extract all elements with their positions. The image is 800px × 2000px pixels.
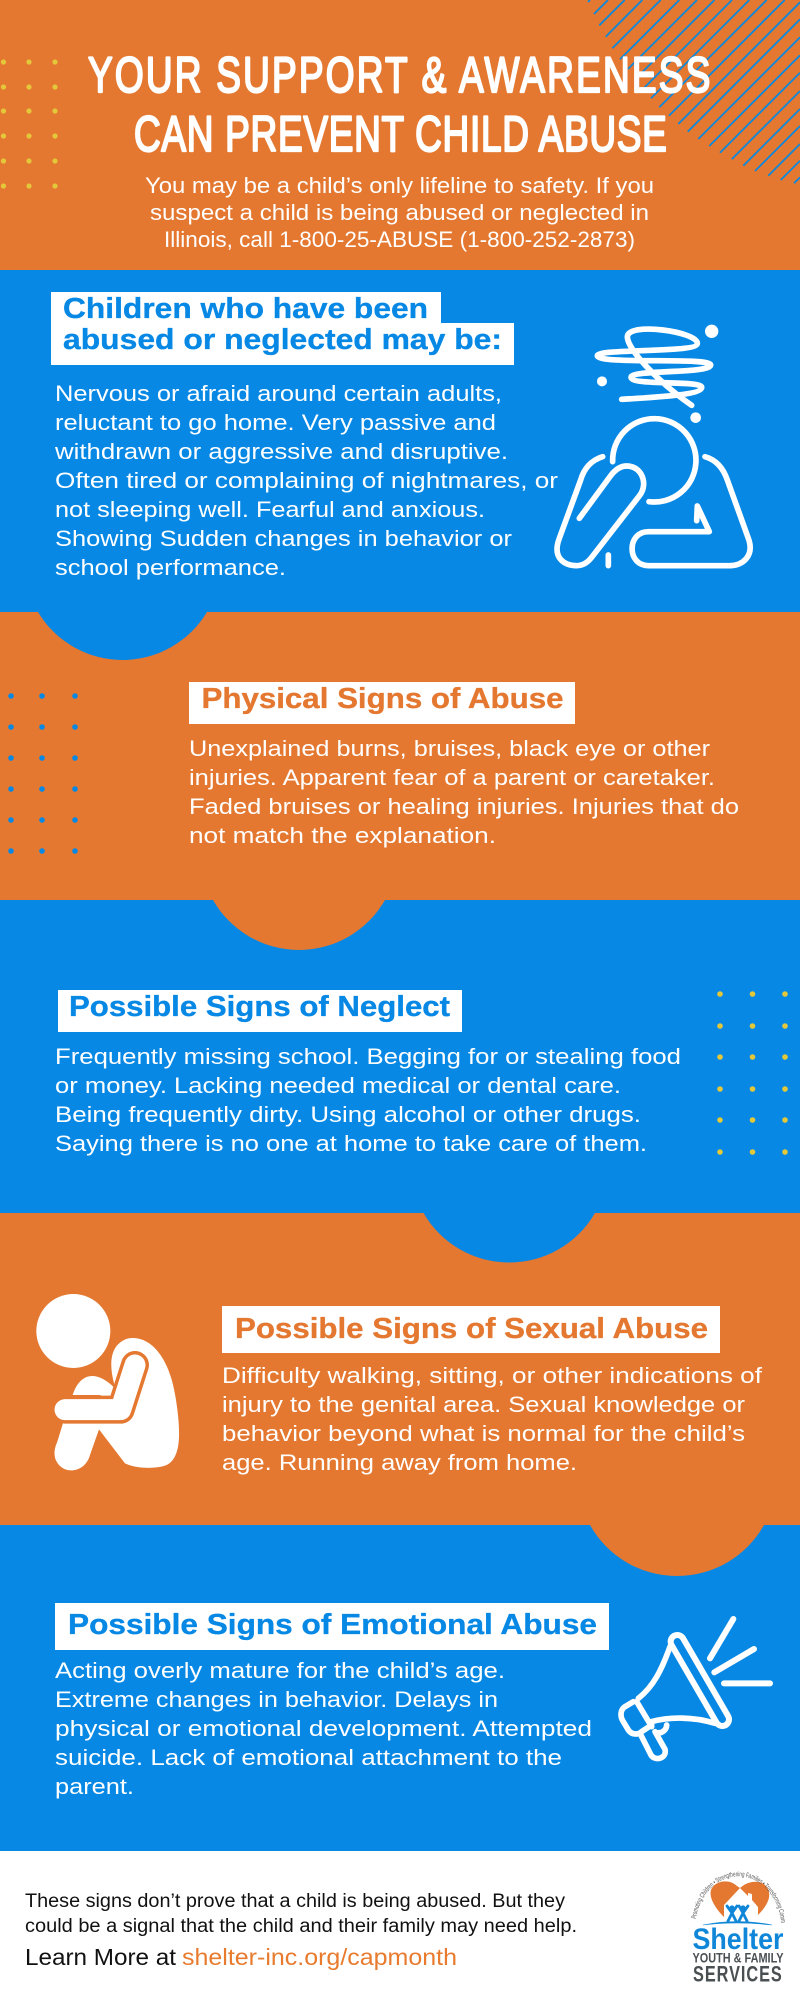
body text: physical or emotional development. Attempted [55,1716,592,1741]
heading [55,1603,609,1650]
body text: age. Running away from home. [222,1450,577,1475]
body text: Extreme changes in behavior. Delays in [55,1687,498,1712]
connector semicircle: blue [38,612,207,660]
subtitle: You may be a child’s only lifeline to safety. If you [145,173,654,198]
connector semicircle: orange [590,1525,764,1576]
dot grid: header [1,59,58,189]
body text: reluctant to go home. Very passive and [55,410,496,435]
footer note: These signs don’t prove that a child is being abused. But they [25,1891,566,1912]
subtitle [145,173,654,252]
connector semicircle: blue [424,1213,595,1263]
learn more link [25,1944,457,1970]
logo children [727,1905,748,1921]
heading [51,292,514,365]
footer note [25,1891,577,1937]
body text: Frequently missing school. Begging for or stealing food [55,1044,681,1069]
panel: possible signs of sexual abuse [0,1213,800,1525]
heading [58,990,462,1032]
body text: or money. Lacking needed medical or dental care. [55,1073,621,1098]
logo: Shelter Youth & Family Services: Promoting Children • Strengthening Families • Transforming Communities [691,1871,785,1923]
heading: Physical Signs of Abuse [202,683,564,715]
body text: behavior beyond what is normal for the child’s [222,1421,745,1446]
body text [54,381,559,580]
connector semicircle: orange [213,900,385,950]
icon: curled-up child [36,1294,179,1470]
body text [222,1363,763,1475]
body text: Acting overly mature for the child’s age. [55,1658,505,1683]
heading: Possible Signs of Emotional Abuse [68,1609,597,1641]
body text: Saying there is no one at home to take care of them. [55,1131,647,1156]
footer note: could be a signal that the child and their family may need help. [25,1916,577,1937]
title: YOUR SUPPORT & AWARENESS [88,48,710,103]
heading: Possible Signs of Sexual Abuse [235,1313,708,1345]
icon: megaphone [621,1619,770,1759]
body text: school performance. [55,555,286,580]
heading [189,682,575,724]
body text: Faded bruises or healing injuries. Injuries that do [189,794,739,819]
icon: stressed person [557,325,750,566]
panel: children who have been abused [0,270,800,612]
logo house [724,1888,758,1922]
panel: possible signs of emotional abuse [0,1525,800,1851]
logo services: SERVICES [693,1962,782,1987]
learn more link: Learn More at [25,1944,177,1970]
panel: physical signs of abuse [0,612,800,900]
logo swoosh [703,1922,772,1925]
panel: possible signs of neglect [0,900,800,1213]
body text: injury to the genital area. Sexual knowledge or [222,1392,746,1417]
logo arc text [696,1876,781,1922]
heading: abused or neglected may be: [63,324,502,356]
dot grid: blue [8,693,78,854]
body text: Difficulty walking, sitting, or other indications of [222,1363,763,1388]
learn more link: shelter-inc.org/capmonth [182,1944,457,1970]
body text: not match the explanation. [189,823,496,848]
logo heart [711,1881,769,1920]
heading: Possible Signs of Neglect [69,991,450,1023]
body text [55,1658,592,1799]
body text: withdrawn or aggressive and disruptive. [54,439,508,464]
body text: injuries. Apparent fear of a parent or caretaker. [189,765,715,790]
title: CAN PREVENT CHILD ABUSE [134,107,667,162]
body text: Often tired or complaining of nightmares, or [55,468,559,493]
body text: Unexplained burns, bruises, black eye or other [189,736,711,761]
subtitle: suspect a child is being abused or neglected in [150,200,649,225]
dot grid: yellow [717,991,788,1155]
body text: Nervous or afraid around certain adults, [55,381,502,406]
heading: Children who have been [63,293,428,325]
body text: Showing Sudden changes in behavior or [55,526,513,551]
logo wordmark: Shelter [692,1923,784,1956]
body text [55,1044,681,1156]
body text: Being frequently dirty. Using alcohol or other drugs. [55,1102,641,1127]
heading [222,1306,720,1353]
panel: header [0,0,800,270]
body text: parent. [55,1774,134,1799]
hatch pattern [588,0,800,183]
subtitle: Illinois, call 1-800-25-ABUSE (1-800-252-2873) [164,227,635,252]
body text [189,736,739,848]
body text: not sleeping well. Fearful and anxious. [55,497,485,522]
body text: suicide. Lack of emotional attachment to the [55,1745,562,1770]
title [88,48,710,162]
